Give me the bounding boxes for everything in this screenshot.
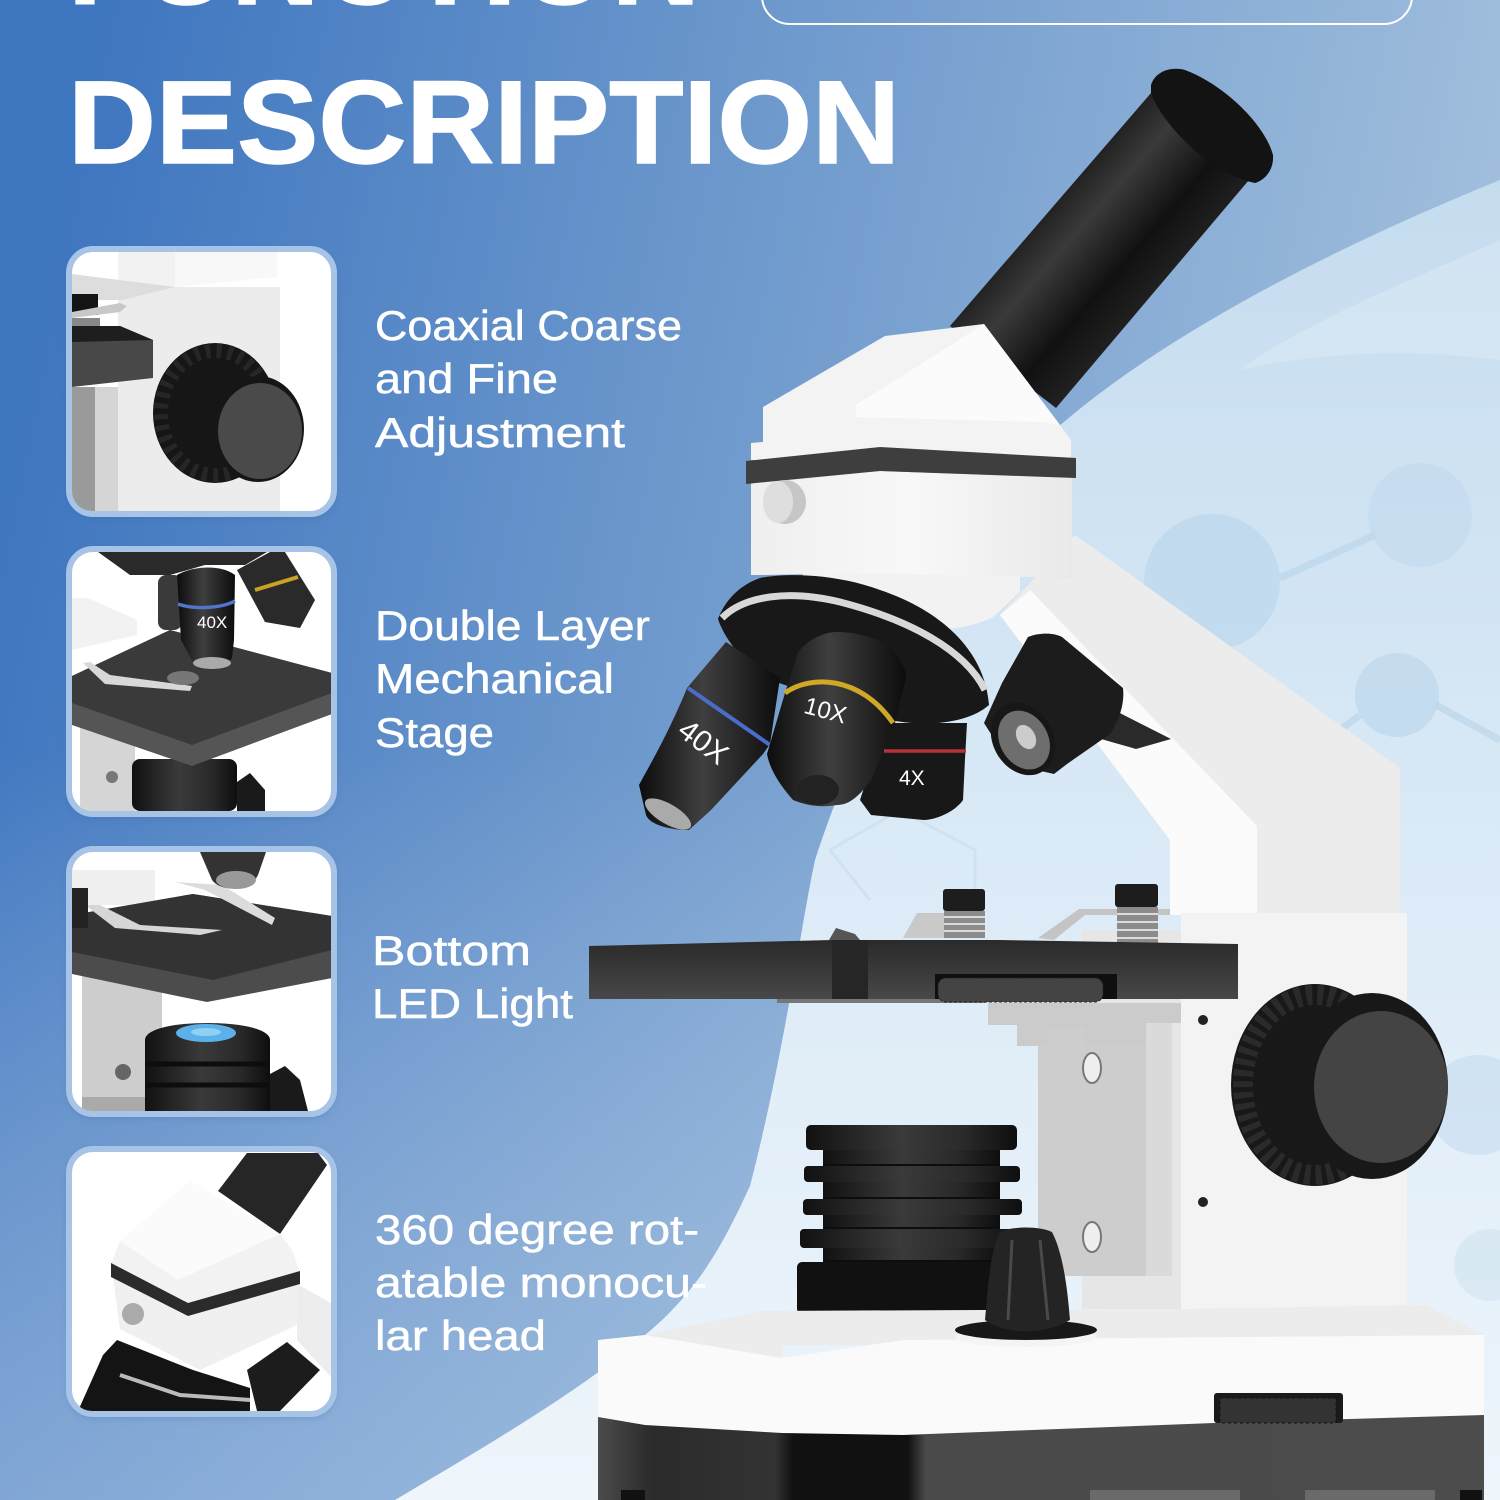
outlined pill at top (762, 0, 1412, 24)
label: bottom LED light: Bottom (372, 927, 531, 974)
label line 2: coaxial adjustment: and Fine (375, 355, 558, 402)
condenser stack (797, 1125, 1022, 1314)
eyepiece tube (950, 69, 1273, 408)
plate top block (988, 1003, 1181, 1046)
thumbnail: bottom LED light (69, 849, 334, 1117)
stage wheel (938, 978, 1103, 1002)
column screws (1083, 1015, 1208, 1252)
stage lower strip (777, 998, 985, 1003)
light curved backdrop with molecule pattern (395, 180, 1500, 1500)
label line 2: bottom LED light: LED Light (372, 980, 573, 1027)
arm (1000, 535, 1400, 915)
label: mechanical stage: Double Layer (375, 602, 650, 649)
thumbnail: mechanical stage: 40X (197, 613, 227, 632)
stage clips and springs (829, 884, 1170, 944)
head screw (763, 480, 806, 524)
objective 10X: 10X (801, 692, 849, 729)
label line 3: monocular head: lar head (375, 1312, 546, 1359)
label line 3: coaxial adjustment: Adjustment (375, 409, 625, 456)
base front (598, 1335, 1484, 1435)
thumbnail: coaxial adjustment knob (69, 249, 334, 517)
LED side lamp (978, 634, 1171, 787)
large focus knob (1231, 984, 1448, 1186)
objective 40X: 40X (672, 713, 734, 772)
label: coaxial adjustment: Coaxial Coarse (375, 302, 682, 349)
title: DESCRIPTION (68, 57, 900, 189)
thumbnail: monocular head (69, 1149, 334, 1417)
head dark band (746, 447, 1076, 484)
label line 3: mechanical stage: Stage (375, 709, 494, 756)
label line 2: mechanical stage: Mechanical (375, 655, 614, 702)
head upper shell (751, 324, 1071, 460)
objective 40X (639, 642, 780, 836)
title (68, 0, 900, 189)
objective 4X (860, 723, 967, 820)
base bottom (598, 1415, 1484, 1500)
stage front edge (832, 940, 868, 999)
arm front face (1000, 590, 1257, 915)
stage wheel slot (935, 974, 1117, 999)
label: monocular head: 360 degree rot- (375, 1206, 699, 1253)
stage (589, 940, 1238, 999)
rack plate side (1146, 1020, 1172, 1276)
label line 2: monocular head: atable monocu- (375, 1259, 707, 1306)
thumbnail: mechanical stage (69, 549, 334, 817)
nosepiece (718, 575, 989, 724)
head collar cone (800, 570, 1020, 630)
microscope (589, 69, 1484, 1500)
dimmer wheel (1214, 1393, 1343, 1423)
brightness knob (955, 1228, 1097, 1347)
rack plate (1038, 1023, 1146, 1276)
column left strip (1082, 930, 1181, 1309)
column (1181, 913, 1407, 1320)
base top (645, 1305, 1484, 1362)
base feet (621, 1490, 1482, 1500)
head lower shell (751, 471, 1072, 578)
objective 10X (767, 632, 906, 806)
head ridge (856, 324, 1060, 425)
objective 4X: 4X (899, 767, 925, 790)
